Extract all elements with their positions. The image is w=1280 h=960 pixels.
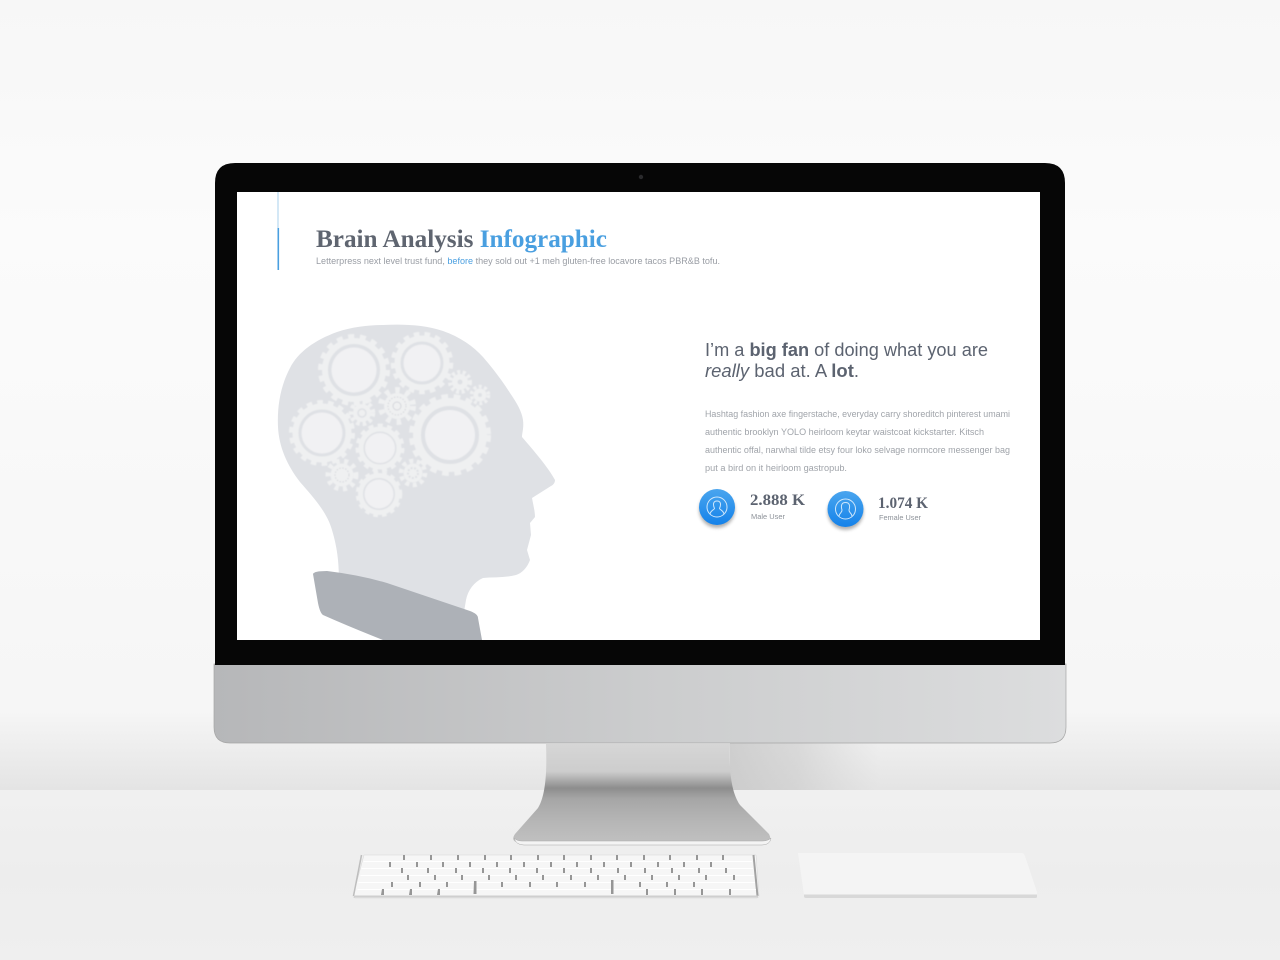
male user value: 2.888 K bbox=[750, 492, 805, 509]
keyboard bbox=[353, 855, 759, 898]
trackpad bbox=[798, 853, 1037, 898]
small gear top right bbox=[450, 372, 470, 392]
webcam bbox=[639, 175, 643, 179]
screen bbox=[237, 192, 1040, 640]
subtitle: Letterpress next level trust fund, before they sold out +1 meh gluten-free locavore tacos PBR&B tofu. bbox=[316, 256, 720, 266]
small gear center left bbox=[351, 402, 373, 424]
head silhouette bbox=[278, 325, 555, 612]
gear 3 bbox=[292, 403, 352, 463]
icon: male user badge bbox=[699, 489, 735, 528]
gear 4 bbox=[358, 426, 402, 470]
headline bbox=[705, 339, 988, 381]
body paragraph: put a bird on it heirloom gastropub. bbox=[705, 463, 847, 473]
head illustration bbox=[278, 325, 555, 640]
small gear center top bbox=[381, 390, 413, 422]
collar bbox=[313, 571, 482, 640]
monitor chin bbox=[214, 664, 1066, 743]
headline: I’m a big fan of doing what you are bbox=[705, 339, 988, 360]
female user value: 1.074 K bbox=[878, 495, 928, 512]
body paragraph: Hashtag fashion axe fingerstache, everyday carry shoreditch pinterest umami bbox=[705, 409, 1010, 419]
gear 2 bbox=[394, 334, 450, 392]
body paragraph: authentic brooklyn YOLO heirloom keytar waistcoat kickstarter. Kitsch bbox=[705, 427, 984, 437]
stat: female user bbox=[828, 491, 928, 530]
body paragraph: authentic offal, narwhal tilde etsy four loko selvage normcore messenger bag bbox=[705, 445, 1010, 455]
icon: female user badge bbox=[828, 491, 864, 530]
monitor stand bbox=[513, 744, 771, 845]
slide header accent line bbox=[278, 192, 279, 270]
headline: really bad at. A lot. bbox=[705, 360, 859, 381]
gears in brain bbox=[292, 334, 488, 515]
body paragraph bbox=[705, 409, 1010, 473]
title: Brain Analysis Infographic bbox=[316, 224, 607, 253]
gear 6 bbox=[358, 473, 400, 515]
monitor bezel bbox=[215, 163, 1065, 665]
stat: male user bbox=[699, 489, 805, 528]
small gear lower right bbox=[401, 461, 425, 485]
female user label: Female User bbox=[879, 513, 921, 522]
small gears bbox=[328, 372, 488, 489]
gear 5 bbox=[412, 398, 488, 472]
small gear lower left bbox=[328, 461, 356, 489]
monitor bbox=[214, 163, 1066, 743]
gear 1 bbox=[321, 337, 387, 403]
male user label: Male User bbox=[751, 512, 785, 521]
small gear far right bbox=[472, 386, 488, 404]
